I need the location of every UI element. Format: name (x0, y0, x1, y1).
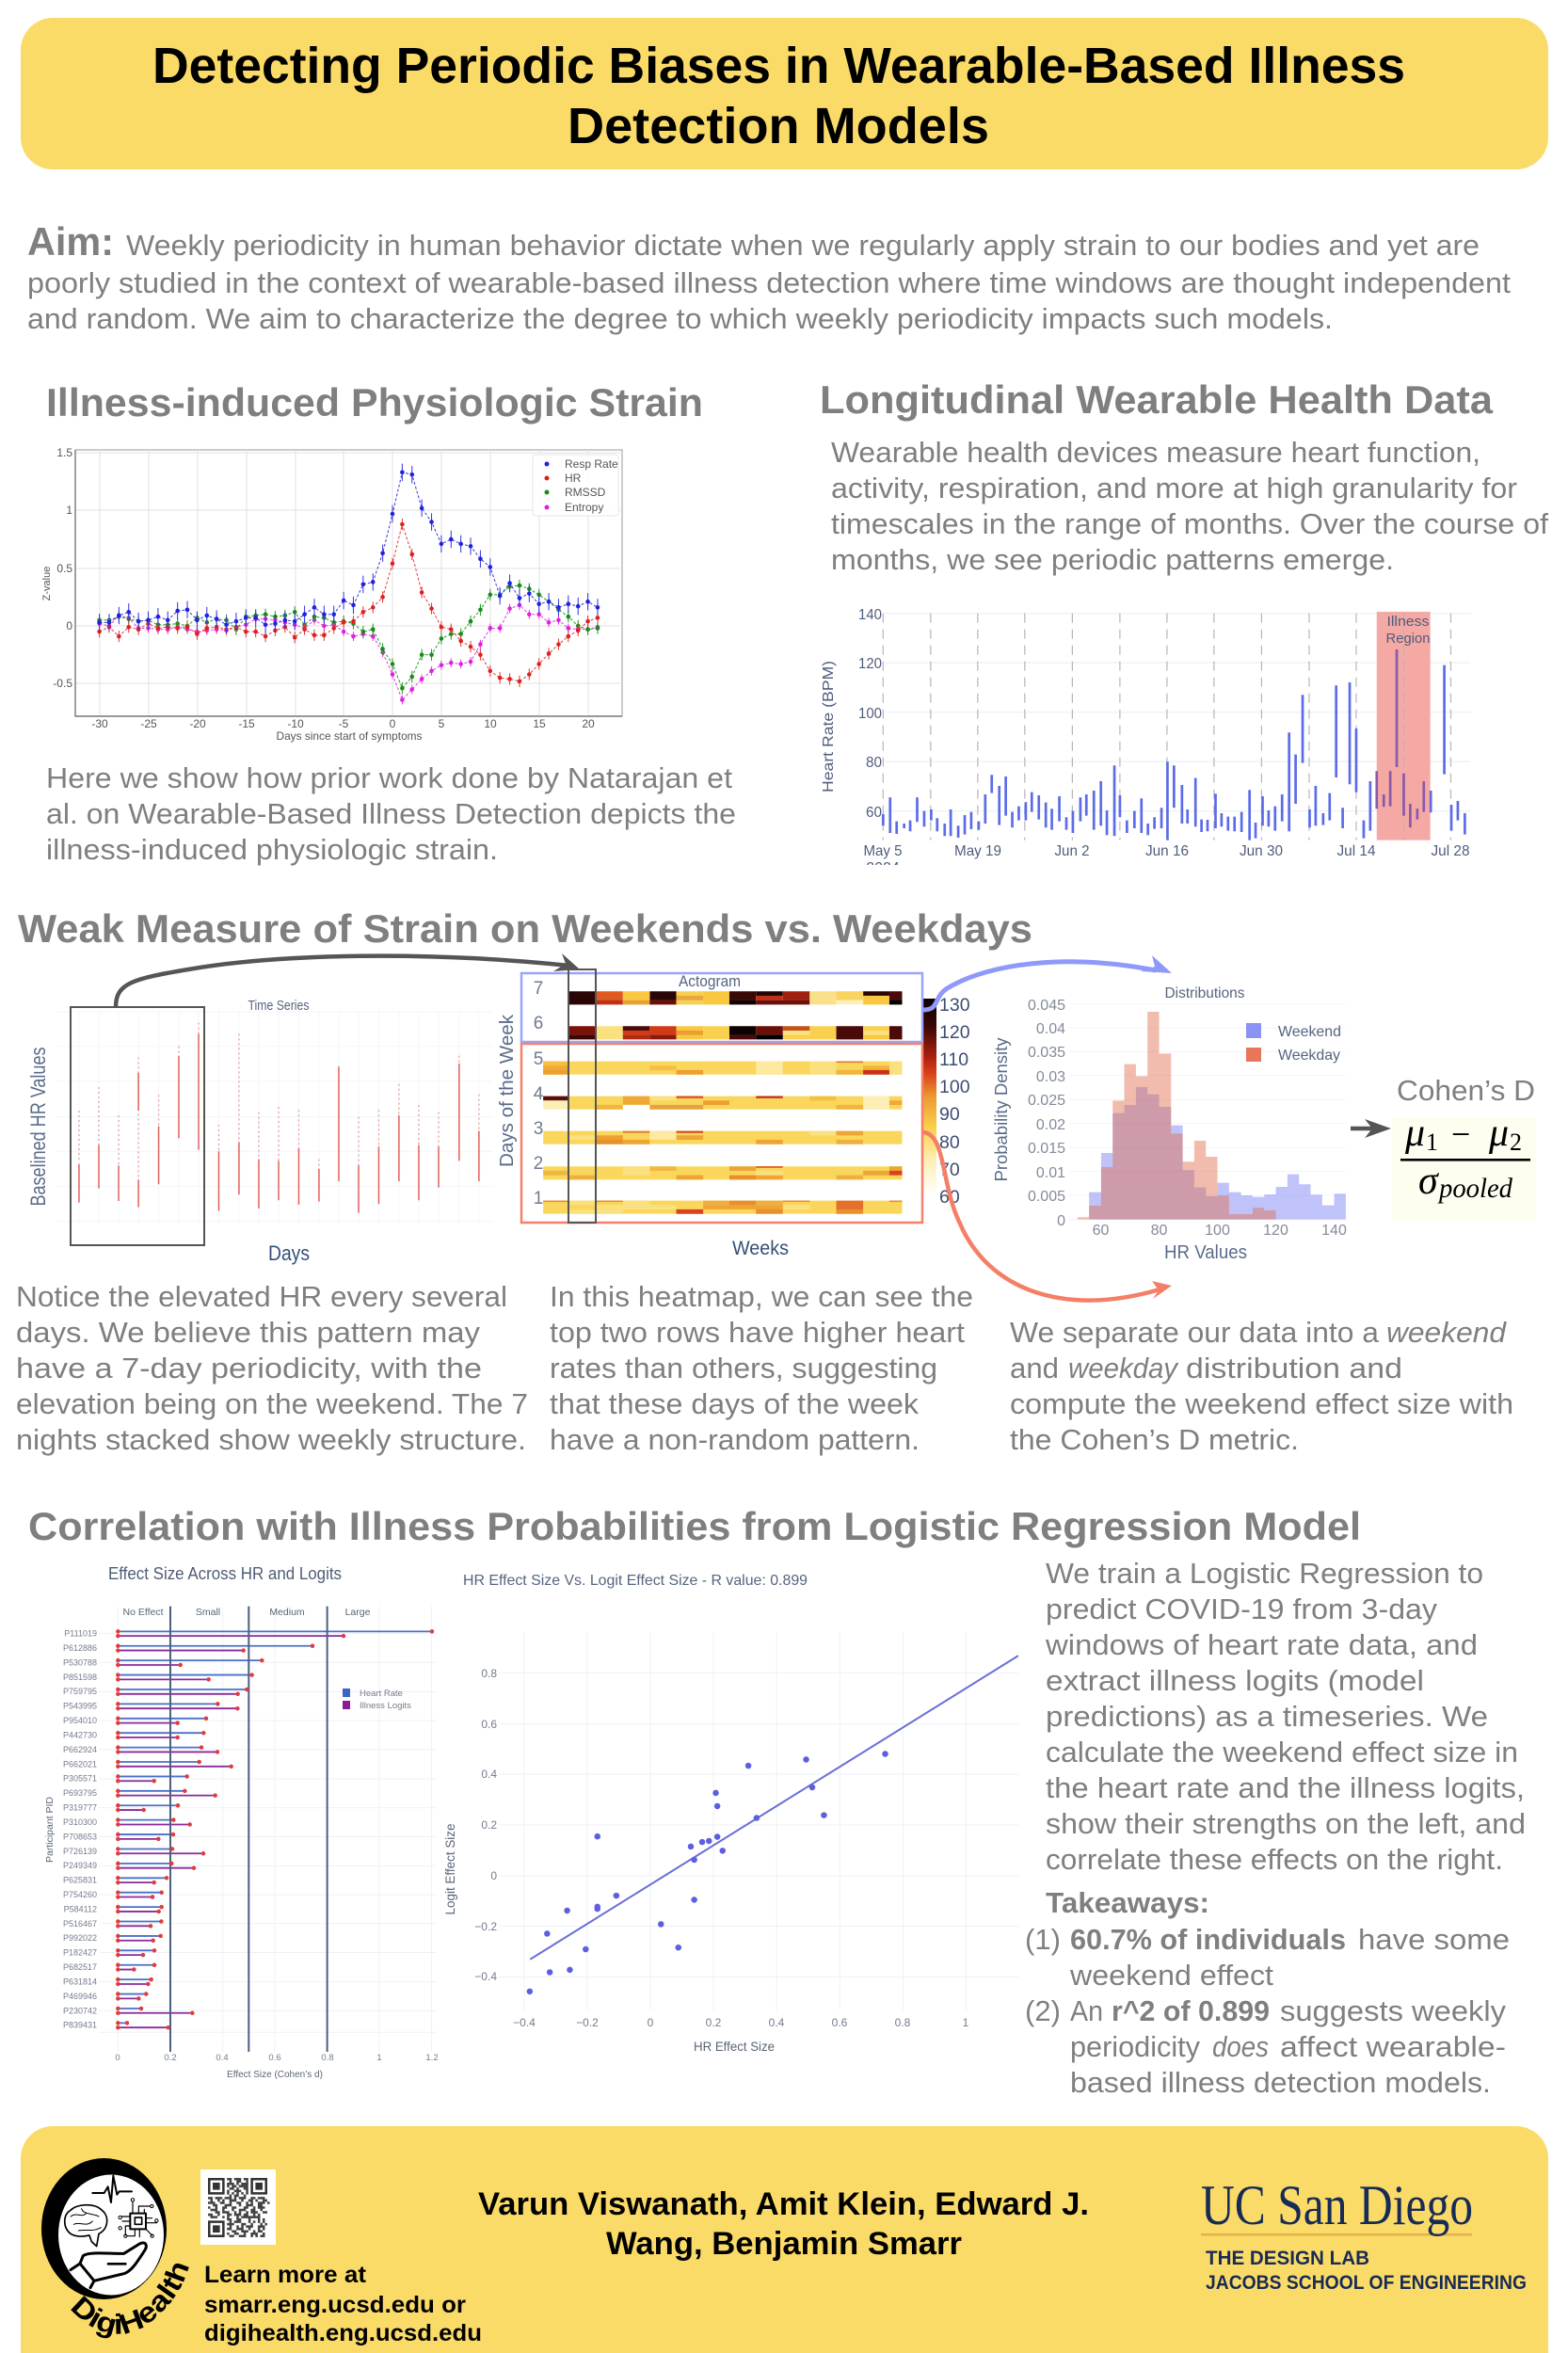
logo: UC San Diego: UC San Diego (1201, 2174, 1473, 2236)
heatmap: actogram by day of week: 5 (534, 1049, 543, 1069)
formula: Cohen's D (1392, 1074, 1536, 1221)
text: logistic regression description: extract illness logits (model (1046, 1664, 1424, 1697)
histogram: weekend vs weekday distributions (991, 985, 1347, 1263)
heatmap: actogram by day of week: 130 (939, 995, 970, 1016)
heatmap: actogram by day of week: 70 (939, 1160, 960, 1180)
lollipop chart: effect size across HR and logits: 0.8 (321, 2053, 334, 2063)
line chart: z-value of physiologic signals: -25 (140, 717, 157, 730)
heatmap: actogram by day of week: 1 (534, 1189, 543, 1209)
lollipop chart: effect size across HR and logits: P851598 (63, 1673, 97, 1682)
line chart: z-value of physiologic signals: HR (565, 472, 582, 485)
lollipop chart: effect size across HR and logits: P230742 (63, 2006, 97, 2015)
lollipop chart: effect size across HR and logits: P516467 (63, 1919, 97, 1929)
takeaways list: 60.7% of individuals (1070, 1923, 1346, 1956)
lollipop chart: effect size across HR and logits: P530788 (63, 1657, 97, 1667)
lollipop chart: effect size across HR and logits: P754260 (63, 1890, 97, 1899)
line chart: heart rate time series with illness region: Heart Rate (BPM) (821, 661, 837, 792)
text: learn more links: digihealth.eng.ucsd.edu (204, 2320, 482, 2346)
heatmap: actogram by day of week: 3 (534, 1119, 543, 1139)
line chart: heart rate time series with illness region: 80 (866, 755, 882, 771)
heatmap: actogram by day of week: Days of the Week (496, 1014, 518, 1167)
arrow: time window to actogram (116, 953, 580, 1007)
heatmap: actogram by day of week (496, 969, 970, 1259)
line chart: z-value of physiologic signals: 0 (66, 619, 72, 632)
row 4 cells (543, 1096, 903, 1110)
footer banner (21, 2126, 1548, 2353)
line chart: heart rate time series with illness region: Region (1385, 631, 1431, 647)
line chart: z-value of physiologic signals (41, 446, 622, 743)
text: prior work description: illness-induced physiologic strain. (46, 833, 498, 866)
heatmap: actogram by day of week: 60 (939, 1187, 960, 1208)
heatmap: actogram by day of week: 2 (534, 1154, 543, 1174)
line chart: z-value of physiologic signals: 1.5 (56, 446, 72, 459)
formula: Cohen's D: μ (1404, 1112, 1425, 1155)
line chart: z-value of physiologic signals: -10 (287, 717, 304, 730)
title banner: Detecting Periodic Biases in Wearable-Based Illness (152, 38, 1405, 94)
line chart: heart rate time series with illness region: Jun 16 (1145, 843, 1189, 859)
text: wearable devices description: Wearable health devices measure heart function, (831, 436, 1480, 469)
histogram: weekend vs weekday distributions: 0.005 (1028, 1189, 1065, 1205)
histogram: weekend vs weekday distributions: 0.015 (1028, 1141, 1065, 1157)
row 5 cells (543, 1062, 903, 1075)
scatter plot: HR effect vs logit effect: 0.8 (895, 2016, 911, 2029)
text column: elevated HR notes: days. We believe this pattern may (16, 1316, 481, 1349)
heading: weak measure of strain: Weak Measure of Strain on Weekends vs. Weekdays (18, 906, 1032, 951)
line chart: heart rate time series with illness region: Jun 2 (1054, 843, 1090, 859)
text: learn more links: Learn more at (204, 2262, 367, 2288)
lollipop chart: effect size across HR and logits: P726139 (63, 1847, 97, 1856)
lollipop chart: effect size across HR and logits: P839431 (63, 2021, 97, 2030)
formula: Cohen's D: σ (1418, 1160, 1440, 1203)
line chart: z-value of physiologic signals: -5 (339, 717, 349, 730)
text: logistic regression description: predictions) as a timeseries. We (1046, 1700, 1488, 1733)
line chart: z-value of physiologic signals: -30 (91, 717, 108, 730)
lollipop chart: effect size across HR and logits: Heart Rate (360, 1689, 403, 1699)
row 7 cells (569, 994, 903, 1002)
text column: heatmap notes: have a non-random pattern. (550, 1423, 920, 1456)
scatter strip chart: time series of baselined HR (26, 998, 493, 1265)
text: prior work description (46, 761, 736, 866)
heatmap: actogram by day of week: 90 (939, 1104, 960, 1125)
scatter strip chart: time series of baselined HR: Days (268, 1241, 310, 1265)
text: wearable devices description: activity, respiration, and more at high granularity for (831, 472, 1517, 504)
lollipop chart: effect size across HR and logits: P310300 (63, 1817, 97, 1827)
lollipop chart: effect size across HR and logits: 0.6 (268, 2053, 281, 2063)
line chart: z-value of physiologic signals: 5 (439, 717, 445, 730)
lollipop chart: effect size across HR and logits: Effect Size Across HR and Logits (108, 1564, 342, 1583)
scatter plot: HR effect vs logit effect: 0.2 (481, 1818, 497, 1832)
histogram: weekend vs weekday distributions: 0.04 (1036, 1021, 1065, 1037)
logo: UC San Diego: THE DESIGN LAB (1206, 2248, 1369, 2269)
lollipop chart: effect size across HR and logits: P693795 (63, 1788, 97, 1798)
aim text block: poorly studied in the context of wearable-based illness detection where time windows are thought independent (27, 266, 1511, 299)
scatter plot: HR effect vs logit effect: 1 (963, 2016, 969, 2029)
text column: weekend effect notes: distribution and (1186, 1352, 1402, 1385)
scatter plot: HR effect vs logit effect: −0.4 (474, 1970, 497, 1983)
line chart: heart rate time series with illness region: Jun 30 (1240, 843, 1283, 859)
histogram: weekend vs weekday distributions: 140 (1321, 1223, 1347, 1239)
takeaways list: periodicity (1070, 2030, 1200, 2063)
line chart: z-value of physiologic signals: 15 (533, 717, 546, 730)
text: wearable devices description: timescales in the range of months. Over the course of (831, 507, 1548, 540)
takeaways list: Takeaways: (1046, 1886, 1209, 1919)
line chart: heart rate time series with illness region: 60 (866, 805, 882, 821)
histogram: weekend vs weekday distributions: 0 (1057, 1213, 1065, 1229)
lollipop chart: effect size across HR and logits: 0.4 (216, 2053, 229, 2063)
lollipop chart: effect size across HR and logits: P469946 (63, 1992, 97, 2001)
histogram: weekend vs weekday distributions: 0.03 (1036, 1069, 1065, 1085)
text: authors: Varun Viswanath, Amit Klein, Edward J. (478, 2186, 1089, 2222)
lollipop chart: effect size across HR and logits: P631814 (63, 1977, 97, 1986)
line chart: heart rate time series with illness region: Jul 14 (1336, 843, 1376, 859)
lollipop chart: effect size across HR and logits: P442730 (63, 1730, 97, 1739)
lollipop chart: effect size across HR and logits: P759795 (63, 1687, 97, 1696)
histogram: weekend vs weekday distributions: HR Values (1164, 1242, 1247, 1263)
takeaways list: An (1070, 1994, 1103, 2027)
takeaways list: does (1212, 2030, 1269, 2063)
text column: heatmap notes: In this heatmap, we can see the (550, 1280, 973, 1313)
heading: longitudinal wearable health data: Longitudinal Wearable Health Data (820, 377, 1494, 422)
line chart: z-value of physiologic signals: -20 (189, 717, 206, 730)
line chart: z-value of physiologic signals: RMSSD (565, 486, 606, 499)
takeaways list: (1) (1025, 1923, 1061, 1956)
scatter plot: HR effect vs logit effect: −0.2 (474, 1920, 497, 1933)
lollipop chart: effect size across HR and logits (44, 1564, 439, 2080)
aim text block: and random. We aim to characterize the degree to which weekly periodicity impacts such models. (27, 302, 1333, 335)
line chart: heart rate time series with illness region (821, 607, 1471, 876)
line chart: z-value of physiologic signals: -15 (238, 717, 255, 730)
row 1 cells (543, 1201, 903, 1214)
line chart: z-value of physiologic signals: Z-value (41, 567, 53, 600)
text column: elevated HR notes (16, 1280, 528, 1456)
line chart: z-value of physiologic signals: Entropy (565, 501, 603, 514)
takeaways list: have some (1358, 1923, 1510, 1956)
scatter plot: HR effect vs logit effect: −0.2 (576, 2016, 599, 2029)
text column: elevated HR notes: elevation being on the weekend. The 7 (16, 1387, 528, 1420)
takeaways list (1025, 1886, 1510, 2099)
text column: heatmap notes: top two rows have higher heart (550, 1316, 965, 1349)
heatmap: actogram by day of week: 120 (939, 1022, 970, 1043)
line chart: heart rate time series with illness region: Illness (1387, 614, 1429, 630)
text: wearable devices description: months, we see periodic patterns emerge. (831, 543, 1394, 576)
line chart: z-value of physiologic signals: 0 (390, 717, 396, 730)
lollipop chart: effect size across HR and logits: Medium (269, 1607, 305, 1618)
text: learn more links: smarr.eng.ucsd.edu or (204, 2292, 466, 2318)
text column: elevated HR notes: have a 7-day periodicity, with the (16, 1352, 482, 1385)
lollipop chart: effect size across HR and logits: P543995 (63, 1702, 97, 1711)
scatter plot: HR effect vs logit effect: 0 (490, 1869, 497, 1882)
takeaways list: suggests weekly (1280, 1994, 1507, 2027)
lollipop chart: effect size across HR and logits: 1.2 (425, 2053, 439, 2063)
histogram: weekend vs weekday distributions: 100 (1205, 1223, 1230, 1239)
line chart: z-value of physiologic signals: 10 (484, 717, 497, 730)
scatter plot: HR effect vs logit effect: 0.6 (832, 2016, 848, 2029)
formula: Cohen's D: 2 (1510, 1128, 1522, 1156)
heatmap: actogram by day of week: 100 (939, 1077, 970, 1097)
formula: Cohen's D: Cohen’s D (1397, 1074, 1535, 1107)
aim text block: Aim: (27, 219, 114, 264)
lollipop chart: effect size across HR and logits: P708653 (63, 1832, 97, 1841)
scatter plot: HR effect vs logit effect (443, 1573, 1018, 2054)
scatter strip chart: time series of baselined HR: Baselined HR Values (26, 1047, 50, 1207)
text column: weekend effect notes: compute the weekend effect size with (1010, 1387, 1513, 1420)
heatmap: actogram by day of week: 7 (534, 979, 543, 999)
text: logistic regression description: calculate the weekend effect size in (1046, 1736, 1518, 1769)
line chart: heart rate time series with illness region: May 19 (954, 843, 1001, 859)
heatmap: actogram by day of week: 6 (534, 1014, 543, 1033)
heatmap: actogram by day of week: 80 (939, 1132, 960, 1153)
lollipop chart: effect size across HR and logits: P111019 (64, 1629, 97, 1639)
scatter strip chart: time series of baselined HR: Time Series (248, 998, 309, 1014)
lollipop chart: effect size across HR and logits: P612886 (63, 1643, 97, 1653)
line chart: heart rate time series with illness region: 100 (858, 706, 882, 722)
logo: UC San Diego: JACOBS SCHOOL OF ENGINEERING (1206, 2272, 1527, 2294)
histogram: weekend vs weekday distributions: 0.01 (1036, 1165, 1065, 1181)
histogram: weekend vs weekday distributions: 0.035 (1028, 1045, 1065, 1061)
text: logistic regression description: predict COVID-19 from 3-day (1046, 1593, 1438, 1625)
histogram: weekend vs weekday distributions: 60 (1093, 1223, 1109, 1239)
text: prior work description: al. on Wearable-Based Illness Detection depicts the (46, 797, 736, 830)
histogram: weekend vs weekday distributions: Weekday (1278, 1048, 1340, 1064)
lollipop chart: effect size across HR and logits: P584112 (64, 1904, 97, 1913)
heading: illness-induced physiologic strain: Illness-induced Physiologic Strain (46, 380, 703, 424)
takeaways list: r^2 of 0.899 (1112, 1994, 1270, 2027)
row 6 cells (569, 1029, 903, 1037)
histogram: weekend vs weekday distributions: 0.02 (1036, 1117, 1065, 1133)
text: logistic regression description: correlate these effects on the right. (1046, 1843, 1503, 1876)
text column: heatmap notes: that these days of the week (550, 1387, 920, 1420)
arrow: distributions to Cohen's D (1351, 1119, 1391, 1138)
text: wearable devices description (831, 436, 1548, 576)
text column: weekend effect notes: We separate our data into a (1010, 1316, 1380, 1349)
scatter plot: HR effect vs logit effect: Logit Effect Size (443, 1824, 457, 1914)
line chart: heart rate time series with illness region: 120 (858, 656, 882, 672)
histogram: weekend vs weekday distributions: 0.025 (1028, 1093, 1065, 1109)
heatmap: actogram by day of week: Weeks (732, 1238, 789, 1259)
formula: Cohen's D: 1 (1426, 1128, 1438, 1156)
line chart: heart rate time series with illness region: 2024 (866, 860, 900, 876)
title banner (21, 18, 1548, 169)
text: logistic regression description: show their strengths on the left, and (1046, 1807, 1526, 1840)
logo: UC San Diego (1201, 2174, 1527, 2294)
lollipop chart: effect size across HR and logits: P662924 (63, 1745, 97, 1754)
text column: weekend effect notes: and (1010, 1352, 1059, 1385)
lollipop chart: effect size across HR and logits: P305571 (63, 1774, 97, 1784)
lollipop chart: effect size across HR and logits: 0.2 (164, 2053, 177, 2063)
lollipop chart: effect size across HR and logits: Illness Logits (360, 1701, 411, 1711)
takeaways list: weekend effect (1069, 1959, 1273, 1992)
scatter plot: HR effect vs logit effect: 0 (648, 2016, 654, 2029)
heading: correlation with illness probabilities: Correlation with Illness Probabilities from Logistic Regression Model (28, 1504, 1361, 1548)
title banner: Detection Models (568, 98, 989, 154)
icon: QR code (200, 2169, 276, 2245)
icon: DigiHealth logo: DigiHealth (71, 2263, 189, 2338)
line chart: heart rate time series with illness region: May 5 (864, 843, 903, 859)
text column: weekend effect notes: the Cohen’s D metric. (1010, 1423, 1299, 1456)
line chart: z-value of physiologic signals: Resp Rate (565, 457, 618, 471)
text: logistic regression description: We train a Logistic Regression to (1046, 1557, 1483, 1590)
lollipop chart: effect size across HR and logits: Small (196, 1607, 220, 1618)
scatter plot: HR effect vs logit effect: 0.4 (769, 2016, 785, 2029)
scatter plot: HR effect vs logit effect: 0.2 (706, 2016, 722, 2029)
scatter plot: HR effect vs logit effect: HR Effect Size (694, 2040, 775, 2054)
row 2 cells (543, 1166, 903, 1179)
scatter plot: HR effect vs logit effect: 0.6 (481, 1718, 497, 1731)
scatter plot: HR effect vs logit effect: 0.8 (481, 1667, 497, 1680)
lollipop chart: effect size across HR and logits: 1 (376, 2053, 382, 2063)
text: prior work description: Here we show how prior work done by Natarajan et (46, 761, 732, 794)
line chart: heart rate time series with illness region: 140 (858, 607, 882, 623)
text column: weekend effect notes (1010, 1316, 1513, 1456)
lollipop chart: effect size across HR and logits: P182427 (63, 1948, 97, 1958)
arrow: weekend rows to distributions (923, 955, 1172, 1010)
formula: Cohen's D: − (1451, 1115, 1470, 1153)
histogram: weekend vs weekday distributions: 120 (1263, 1223, 1288, 1239)
lollipop chart: effect size across HR and logits: P992022 (63, 1933, 97, 1943)
line chart: z-value of physiologic signals: 1 (66, 504, 72, 517)
aim text block (27, 219, 1511, 335)
line chart: z-value of physiologic signals: -0.5 (53, 677, 72, 690)
text: authors: Wang, Benjamin Smarr (606, 2226, 962, 2262)
line chart: heart rate time series with illness region: Jul 28 (1431, 843, 1470, 859)
lollipop chart: effect size across HR and logits: Large (345, 1607, 371, 1618)
lollipop chart: effect size across HR and logits: P319777 (63, 1803, 97, 1813)
text column: elevated HR notes: Notice the elevated HR every several (16, 1280, 507, 1313)
lollipop chart: effect size across HR and logits: P682517 (63, 1962, 97, 1972)
text column: elevated HR notes: nights stacked show weekly structure. (16, 1423, 526, 1456)
takeaways list: affect wearable- (1280, 2030, 1506, 2063)
text: logistic regression description (1045, 1557, 1526, 1876)
lollipop chart: effect size across HR and logits: P625831 (63, 1876, 97, 1885)
line chart: z-value of physiologic signals: Days since start of symptoms (277, 729, 422, 743)
text column: heatmap notes (550, 1280, 973, 1456)
scatter plot: HR effect vs logit effect: HR Effect Size Vs. Logit Effect Size - R value: 0.899 (463, 1573, 808, 1589)
line chart: z-value of physiologic signals: 20 (582, 717, 595, 730)
line chart: z-value of physiologic signals: 0.5 (56, 562, 72, 575)
histogram: weekend vs weekday distributions: Distributions (1165, 985, 1244, 1001)
lollipop chart: effect size across HR and logits: No Effect (122, 1607, 164, 1618)
text: authors (478, 2186, 1089, 2262)
heatmap: actogram by day of week: 4 (534, 1084, 544, 1104)
text: logistic regression description: the heart rate and the illness logits, (1046, 1771, 1525, 1804)
histogram: weekend vs weekday distributions: Weekend (1278, 1024, 1341, 1040)
text column: heatmap notes: rates than others, suggesting (550, 1352, 937, 1385)
formula: Cohen's D: μ (1488, 1112, 1509, 1155)
takeaways list: (2) (1025, 1994, 1061, 2027)
lollipop chart: effect size across HR and logits: Effect Size (Cohen’s d) (227, 2070, 323, 2080)
text: learn more links (204, 2262, 482, 2346)
text column: weekend effect notes: weekday (1068, 1352, 1179, 1385)
histogram: weekend vs weekday distributions: 80 (1151, 1223, 1167, 1239)
takeaways list: based illness detection models. (1070, 2066, 1491, 2099)
histogram: weekend vs weekday distributions: Probability Density (991, 1037, 1011, 1182)
heatmap: actogram by day of week: 110 (939, 1049, 968, 1070)
formula: Cohen's D: pooled (1437, 1173, 1513, 1204)
text column: weekend effect notes: weekend (1386, 1316, 1508, 1349)
lollipop chart: effect size across HR and logits: P662021 (63, 1759, 97, 1769)
histogram: weekend vs weekday distributions: 0.045 (1028, 998, 1065, 1014)
arrow: weekday rows to distributions (923, 1132, 1172, 1301)
row 3 cells (543, 1131, 903, 1144)
icon: DigiHealth logo (41, 2158, 189, 2338)
lollipop chart: effect size across HR and logits: Participant PID (44, 1797, 56, 1863)
scatter plot: HR effect vs logit effect: 0.4 (481, 1768, 497, 1781)
lollipop chart: effect size across HR and logits: P249349 (63, 1861, 97, 1870)
heatmap: actogram by day of week: Actogram (679, 972, 741, 990)
lollipop chart: effect size across HR and logits: P954010 (63, 1716, 97, 1725)
scatter plot: HR effect vs logit effect: −0.4 (513, 2016, 536, 2029)
text: logistic regression description: windows of heart rate data, and (1045, 1628, 1478, 1661)
lollipop chart: effect size across HR and logits: 0 (115, 2053, 120, 2063)
aim text block: Weekly periodicity in human behavior dictate when we regularly apply strain to our bodies and yet are (126, 229, 1480, 262)
